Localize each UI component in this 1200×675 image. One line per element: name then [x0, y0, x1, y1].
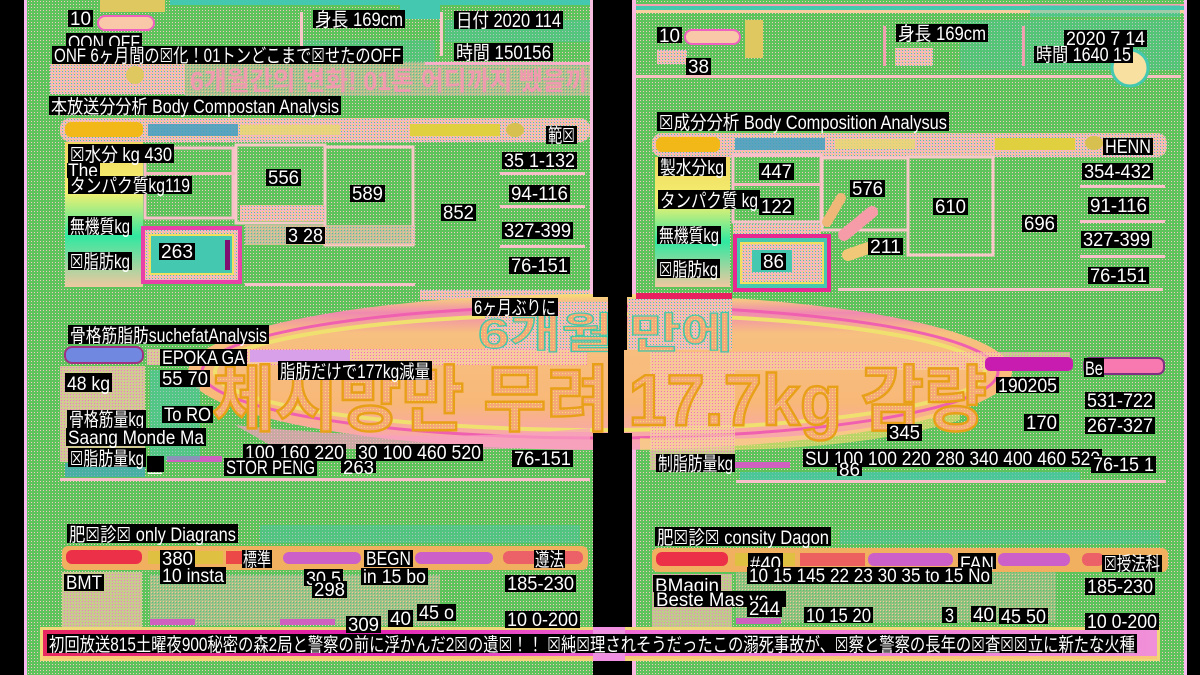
value: 48 kg: 48 kg: [67, 374, 110, 395]
label: minerals: 無機質kg: [70, 216, 130, 238]
range: 76-151: 76-151: [511, 256, 568, 277]
range: 91-116: 91-116: [1090, 196, 1147, 217]
label: STOR PENG: STOR PENG: [226, 458, 315, 479]
value: 556: 556: [268, 168, 299, 189]
heading: body composition: 本放送分分析 Body Compostan Analysis: [51, 96, 339, 118]
range: 94-116: 94-116: [511, 184, 568, 205]
axis: 55 70: 55 70: [162, 369, 208, 390]
value: 345: 345: [889, 423, 920, 444]
header ornaments: [657, 20, 1148, 86]
range: 35 1-132: 35 1-132: [504, 151, 575, 172]
chart title: big weight loss headline: [212, 310, 987, 441]
subheading: Korean headline strip: 6개월간의 변화! 01톤 어디까지 뺐을까: [190, 66, 588, 96]
range: 354-432: 354-432: [1084, 162, 1151, 183]
axis: 190205: 190205: [998, 376, 1057, 397]
label: after six months: 6ヶ月ぶりに: [474, 298, 556, 319]
range: 76-15 1: 76-15 1: [1093, 455, 1154, 476]
value: 86: 86: [763, 252, 784, 273]
label: time: 時間 150156: [456, 42, 551, 64]
body composition header bar: [60, 118, 590, 142]
panel: right measurement sheet: [632, 0, 1187, 675]
value: 298: 298: [314, 580, 345, 601]
axis: 100 160 220: 100 160 220: [245, 443, 344, 464]
label: protein: タンパク質kg119: [70, 175, 190, 197]
label: protein: タンパク質 kg: [660, 190, 758, 212]
label: skeletal muscle mass: 骨格筋量kg: [69, 409, 144, 431]
label: dashes: __: [147, 454, 162, 475]
label: water: 製水分kg: [660, 157, 724, 179]
chart title: big weight loss headline: 체지방만 무려 17.7kg 감량: [212, 361, 987, 441]
icon: hand pointing arrows: [827, 198, 872, 255]
label: lean mass: 制脂肪量kg: [658, 453, 733, 475]
axis: 40: 40: [390, 609, 411, 630]
panel: left obesity diagnosis chart: [62, 525, 588, 628]
label: body fat mass: ☒脂肪量kg: [70, 448, 144, 470]
range: 531-722: 531-722: [1087, 391, 1153, 412]
axis: #40: #40: [750, 554, 781, 575]
label: water: ☒水分 kg 430: [70, 144, 172, 166]
panel: right obesity diagnosis chart: [652, 530, 1168, 628]
range: 185-230: 185-230: [507, 574, 574, 595]
value: 309: 309: [348, 615, 379, 636]
value: 122: 122: [761, 197, 792, 218]
header divider lines: [300, 12, 590, 65]
highlighted body fat cell: [143, 228, 240, 282]
value: 3 28: 3 28: [288, 226, 323, 247]
value: 852: 852: [443, 203, 474, 224]
label: date: 2020 7 14: [1066, 29, 1145, 50]
label: Saang Monde Ma: Saang Monde Ma: [68, 428, 204, 449]
heading: obesity diagnosis: 肥☒診☒ consity Dagon: [657, 527, 829, 549]
label: time: 時間 1640 15: [1036, 44, 1131, 66]
label: department: ☒授法科: [1104, 553, 1160, 575]
label: Be: Be: [1085, 359, 1103, 380]
value: 170: 170: [1026, 413, 1057, 434]
text labels: right obesity diagnosis: [653, 527, 1162, 633]
panel: left measurement sheet: [24, 0, 593, 675]
label: Beste Mas: Beste Mas vc: [656, 590, 768, 611]
banner: central speech ellipse: [188, 293, 1012, 451]
axis: lean mass scale: SU 100 100 220 280 340 400 460 520: [805, 449, 1100, 470]
range: 327-399: 327-399: [1083, 230, 1150, 251]
range: 327-399: 327-399: [504, 221, 571, 242]
centre gap: black split between sheets: [593, 0, 632, 675]
label: date: 日付 2020 114: [456, 10, 561, 32]
range: 10 0-200: 10 0-200: [1087, 612, 1157, 633]
axis: 30 5: 30 5: [306, 569, 341, 590]
label: The: The: [68, 161, 98, 182]
body composition header bar: [652, 133, 1167, 157]
caption bar background: [40, 627, 1160, 661]
range: 10 0-200: 10 0-200: [507, 610, 578, 631]
axis: 380: 380: [162, 549, 193, 570]
label: HENN: HENN: [1105, 137, 1151, 158]
label: six month change: ONF 6ヶ月間の☒化！01トンどこまで☒せたのOFF: [54, 45, 401, 67]
range: 76-151: 76-151: [514, 449, 571, 470]
text labels: right skeletal muscle: [656, 358, 1156, 481]
label: range: 範☒: [548, 125, 575, 147]
text labels: left obesity diagnosis: [64, 524, 580, 636]
label: height: 身長 169cm: [898, 23, 986, 45]
value: 244: 244: [749, 599, 780, 620]
label: standard: 標準: [243, 549, 271, 571]
label: height: 身長 169cm: [315, 9, 403, 31]
body composition table: [65, 142, 590, 300]
value: 86: 86: [839, 460, 860, 481]
label: To RO: To RO: [164, 405, 211, 426]
axis: 10 insta: 10 insta: [162, 566, 224, 587]
value: 696: 696: [1024, 214, 1055, 235]
text labels: left sheet header: [52, 9, 563, 67]
label: OON OFF: OON OFF: [68, 33, 140, 54]
value: 263: 263: [343, 458, 374, 479]
label: FAN: FAN: [960, 554, 994, 575]
chart title: big weight loss headline: 6개월 만에: [478, 310, 733, 357]
text labels: right body composition: [657, 112, 1153, 287]
axis: 10 15 20: 10 15 20: [806, 606, 871, 627]
range: 76-151: 76-151: [1090, 266, 1147, 287]
value: 263: 263: [161, 242, 193, 263]
value: 576: 576: [852, 179, 883, 200]
label: BMT: BMT: [66, 573, 102, 594]
label: minerals: 無機質kg: [659, 225, 719, 247]
text labels: right sheet header: [657, 23, 1147, 78]
label: BMagin: BMagin: [655, 576, 719, 597]
value: 447: 447: [761, 162, 792, 183]
value: 211: 211: [870, 237, 901, 258]
body composition table: [655, 155, 1165, 291]
panel: left skeletal muscle chart: [60, 347, 590, 481]
text labels: left skeletal muscle: [65, 325, 573, 479]
label: body fat: ☒脂肪kg: [659, 259, 718, 281]
label: 10: 10: [70, 9, 91, 30]
value: 610: 610: [935, 197, 966, 218]
axis: 3: 3: [945, 606, 954, 627]
heading: obesity diagnosis: 肥☒診☒ only Diagrans: [69, 524, 236, 546]
range: 185-230: 185-230: [1087, 577, 1153, 598]
heading: skeletal muscle fat: 骨格筋脂肪suchefatAnalysis: [70, 325, 267, 347]
axis: 30 100 460 520: 30 100 460 520: [358, 443, 481, 464]
label: 38: 38: [688, 57, 709, 78]
axis: BMI scale: 10 15 145 22 23 30 35 to 15 No: [749, 566, 990, 587]
label: BEGN: BEGN: [366, 549, 411, 570]
axis: in 15 bo: in 15 bo: [363, 567, 426, 588]
range: 267-327: 267-327: [1087, 416, 1153, 437]
caption: fat loss: 脂肪だけで177kg減量: [280, 361, 430, 383]
axis: 40: 40: [973, 605, 994, 626]
label: body fat: ☒脂肪kg: [70, 251, 130, 273]
highlighted body fat cell: [735, 236, 829, 290]
axis: 45 o: 45 o: [419, 603, 454, 624]
logo block: [50, 0, 185, 94]
text labels: left body composition: [49, 96, 577, 319]
panel: right skeletal muscle chart: [650, 352, 1166, 483]
axis: 45 50: 45 50: [1001, 607, 1046, 628]
label: 10: 10: [659, 26, 680, 47]
label: EPOKA GA: EPOKA GA: [162, 348, 245, 369]
heading: body composition: ☒成分分析 Body Composition Analysus: [659, 112, 947, 134]
value: 589: 589: [352, 184, 383, 205]
label: legal: 遵法: [535, 549, 564, 571]
